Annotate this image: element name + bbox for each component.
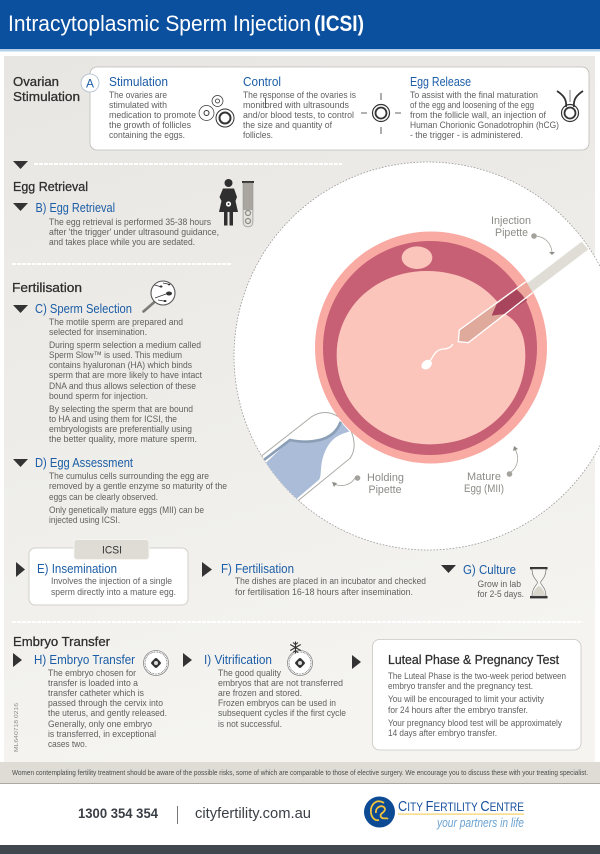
label: holding pipette: Pipette — [368, 484, 402, 496]
text: H embryo transfer: is transferred, in exceptional — [48, 728, 156, 739]
text: egg release: from the follicle wall, an injection of — [410, 109, 546, 120]
text: I vitrification — [204, 653, 346, 729]
text: C sperm selection: embryologists are preferentially using — [49, 423, 192, 434]
panel: luteal phase and pregnancy test: 14 days after embryo transfer. — [388, 727, 497, 738]
icon: woman — [219, 179, 238, 226]
ICSI tab — [74, 540, 149, 560]
text: I vitrification: subsequent cycles if the first cycle — [218, 707, 346, 718]
text: D egg assessment: D) Egg Assessment — [35, 456, 133, 470]
footer contact: 1300 354 354 — [78, 805, 158, 821]
icon: magnifier with sperm — [144, 281, 175, 312]
section: embryo transfer — [13, 634, 581, 752]
text: control — [243, 75, 356, 140]
text: control: monitored with ultrasounds — [243, 99, 349, 110]
logo: city fertility centre: your partners in life — [436, 815, 524, 830]
text: egg release: Egg Release — [410, 75, 471, 89]
text: stimulation: The ovaries are — [109, 89, 167, 100]
text: E insemination: sperm directly into a mature egg. — [51, 586, 176, 597]
panel: luteal phase and pregnancy test: for 24 hours after the embryo transfer. — [388, 704, 528, 715]
arrow D — [13, 459, 28, 467]
icon: follicles — [199, 96, 234, 127]
ICSI diagram circle — [234, 162, 600, 550]
text: H embryo transfer: Generally, only one embryo — [48, 718, 152, 729]
text: C sperm selection: During sperm selection a medium called — [49, 339, 201, 350]
text: egg release: To assist with the final maturation — [410, 89, 538, 100]
icon: embryo — [144, 650, 168, 676]
icon: monitored follicle — [361, 93, 401, 134]
footer contact — [78, 805, 311, 824]
text: C sperm selection: DNA and thus allows selection of these — [49, 380, 196, 391]
text: G culture — [463, 563, 524, 599]
text: C sperm selection: the better quality, more mature sperm. — [49, 433, 197, 444]
text: I vitrification: Frozen embryos can be used in — [218, 697, 336, 708]
text: G culture: for 2-5 days. — [478, 588, 524, 599]
text: H embryo transfer: the uterus, and gently released. — [48, 707, 167, 718]
text: F fertilisation: The dishes are placed in an incubator and checked — [235, 575, 426, 586]
injection pipette — [458, 242, 588, 343]
text: E insemination: Involves the injection of a single — [51, 575, 172, 586]
icon: frozen embryo — [288, 642, 312, 676]
arrow H — [13, 653, 22, 667]
label: injection pipette: Pipette — [495, 227, 528, 239]
text: egg release: - the trigger - is administered. — [410, 129, 523, 140]
heading: embryo transfer: Embryo Transfer — [13, 634, 111, 649]
panel: luteal phase and pregnancy test: You will be encouraged to limit your activity — [388, 693, 544, 704]
text: H embryo transfer: H) Embryo Transfer — [34, 653, 135, 667]
heading: egg retrieval: Egg Retrieval — [13, 179, 88, 194]
text: stimulation: the growth of follicles — [109, 119, 191, 130]
text: stimulation: containing the eggs. — [109, 129, 185, 140]
label: injection pipette — [491, 215, 555, 255]
text: C sperm selection: bound sperm for injection. — [49, 390, 148, 401]
text: egg release: Human Chorionic Gonadotrophin (hCG) — [410, 119, 559, 130]
panel: stimulation, control, egg release — [90, 67, 589, 150]
label: holding pipette: Holding — [367, 472, 404, 484]
text: H embryo transfer: passed through the cervix into — [48, 697, 163, 708]
icon: hourglass — [530, 567, 548, 598]
text: C sperm selection: to HA and using them for ICSI, the — [49, 413, 177, 424]
heading: ovarian stimulation: Stimulation — [13, 89, 80, 104]
footer contact: cityfertility.com.au — [195, 805, 311, 822]
arrow I — [183, 653, 192, 667]
ICSI tab: ICSI — [102, 544, 122, 556]
text: D egg assessment — [35, 456, 227, 525]
text: egg release — [410, 75, 559, 140]
heading: fertilisation: Fertilisation — [12, 280, 82, 295]
holding pipette — [262, 412, 355, 500]
text: control: The response of the ovaries is — [243, 89, 356, 100]
panel: luteal phase and pregnancy test: embryo transfer and the pregnancy test. — [388, 680, 533, 691]
section: ovarian stimulation — [13, 67, 589, 150]
logo: city fertility centre: CITY FERTILITY CENTRE — [398, 799, 524, 815]
text: stimulation: Stimulation — [109, 75, 168, 89]
text: C sperm selection: sperm that are more likely to have intact — [49, 369, 202, 380]
arrow to luteal phase — [352, 655, 361, 669]
text: H embryo transfer: cases two. — [48, 738, 87, 749]
text: G culture: G) Culture — [463, 563, 516, 577]
text: D egg assessment: Only genetically mature eggs (MII) can be — [49, 504, 204, 515]
text: B egg retrieval: after 'the trigger' under ultrasound guidance, — [49, 226, 219, 237]
section: fertilisation — [12, 280, 227, 525]
label: mature egg: Mature — [467, 471, 501, 483]
footer bar — [0, 845, 600, 854]
text: egg release: of the egg and loosening of the egg — [410, 99, 534, 110]
arrow E — [16, 562, 25, 577]
text: G culture: Grow in lab — [478, 578, 521, 589]
text: C sperm selection: selected for insemination. — [49, 326, 147, 337]
text: H embryo transfer: transfer is loaded into a — [48, 677, 139, 688]
text: H embryo transfer — [34, 653, 167, 749]
text: C sperm selection: contains hyaluronan (HA) which binds — [49, 359, 192, 370]
badge A: A — [86, 76, 94, 90]
text: I vitrification: is not successful. — [218, 718, 282, 729]
label: injection pipette: Injection — [491, 215, 531, 227]
step: G culture — [441, 563, 548, 599]
text: D egg assessment: injected using ICSI. — [49, 514, 120, 525]
text: control: Control — [243, 75, 281, 89]
text: C sperm selection: By selecting the sperm that are bound — [49, 403, 193, 414]
text: control: and/or blood tests, to control — [243, 109, 354, 120]
text: stimulation: stimulated with — [109, 99, 167, 110]
text: control: follicles. — [243, 129, 273, 140]
text: stimulation: medication to promote — [109, 109, 196, 120]
header band — [0, 0, 600, 52]
text: C sperm selection: The motile sperm are prepared and — [49, 316, 183, 327]
text: I vitrification: The good quality — [218, 667, 281, 678]
panel: ICSI insemination — [16, 540, 188, 605]
text: B egg retrieval — [36, 201, 219, 247]
text: B egg retrieval: The egg retrieval is performed 35-38 hours — [49, 216, 211, 227]
text: H embryo transfer: transfer catheter which is — [48, 687, 144, 698]
icon: test tube — [242, 181, 254, 227]
arrow B — [13, 203, 28, 211]
document code: ML640718 0216 — [14, 703, 20, 752]
text: D egg assessment: The cumulus cells surrounding the egg are — [49, 470, 209, 481]
title: (ICSI) — [314, 11, 364, 36]
text: B egg retrieval: and takes place while you are sedated. — [49, 236, 195, 247]
sperm — [420, 344, 453, 372]
section: egg retrieval — [13, 179, 254, 247]
heading: ovarian stimulation — [13, 74, 80, 104]
text: E insemination: E) Insemination — [37, 562, 117, 576]
label: mature egg: Egg (MII) — [464, 483, 504, 495]
text: I vitrification: I) Vitrification — [204, 653, 272, 667]
panel: luteal phase and pregnancy test — [372, 640, 581, 750]
label: holding pipette — [332, 472, 404, 496]
text: D egg assessment: eggs can be clearly observed. — [49, 491, 158, 502]
panel: luteal phase and pregnancy test: The Luteal Phase is the two-week period between — [388, 670, 566, 681]
text: D egg assessment: removed by a gentle enzyme so maturity of the — [49, 480, 227, 491]
text: B egg retrieval: B) Egg Retrieval — [36, 201, 115, 215]
icon: egg release — [557, 90, 583, 122]
disclaimer band — [0, 762, 600, 784]
arrow G — [441, 565, 456, 573]
title: Intracytoplasmic Sperm Injection — [8, 11, 311, 36]
text: C sperm selection: C) Sperm Selection — [35, 302, 132, 316]
heading: ovarian stimulation: Ovarian — [13, 74, 59, 89]
panel: luteal phase and pregnancy test: Your pregnancy blood test will be approximately — [388, 717, 562, 728]
step: F fertilisation — [202, 562, 426, 597]
badge A — [81, 74, 99, 92]
text: I vitrification: embryos that are not transferred — [218, 677, 343, 688]
arrow F — [202, 562, 212, 577]
panel: luteal phase and pregnancy test: Luteal Phase & Pregnancy Test — [388, 652, 559, 667]
arrow C — [13, 305, 28, 313]
text: control: the size and quantity of — [243, 119, 332, 130]
text: C sperm selection: Sperm Slow™ is used. This medium — [49, 349, 182, 360]
label: mature egg — [464, 446, 518, 495]
text: E insemination — [37, 562, 176, 597]
text: F fertilisation: for fertilisation 16-18 hours after insemination. — [235, 586, 413, 597]
text: stimulation — [109, 75, 196, 140]
logo: city fertility centre — [364, 796, 524, 830]
mature egg — [315, 232, 588, 464]
text: F fertilisation — [221, 562, 426, 597]
text: F fertilisation: F) Fertilisation — [221, 562, 294, 576]
text: H embryo transfer: The embryo chosen for — [48, 667, 136, 678]
text: C sperm selection — [35, 302, 202, 444]
arrow: to egg retrieval — [13, 161, 28, 169]
text: I vitrification: are frozen and stored. — [218, 687, 302, 698]
